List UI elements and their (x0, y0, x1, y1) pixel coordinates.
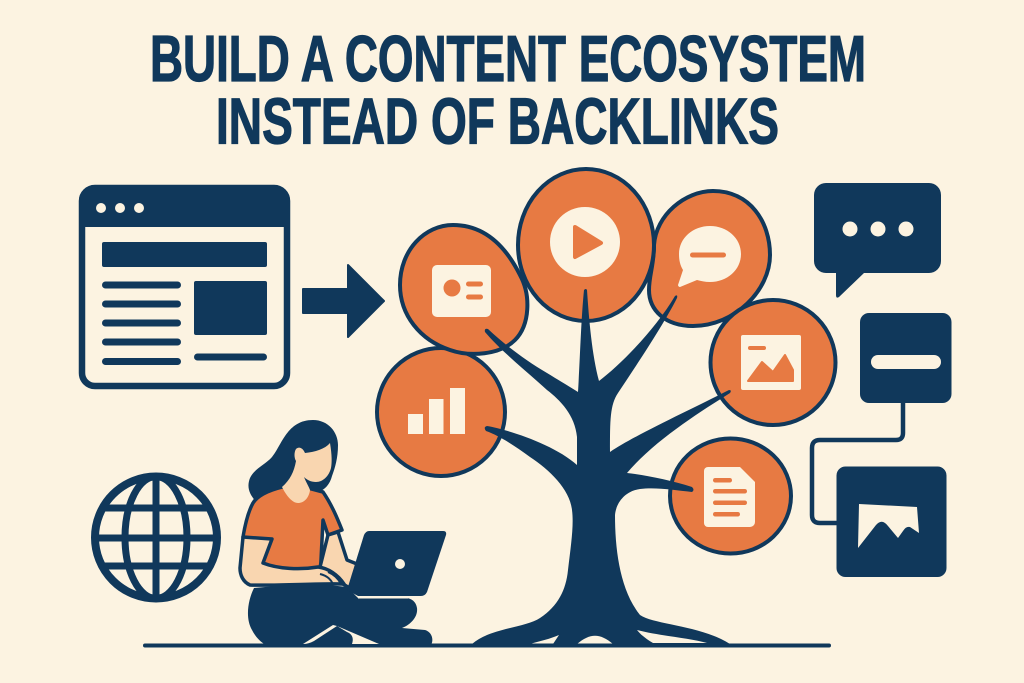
finger lines (320, 572, 341, 584)
left arm (240, 537, 344, 585)
person with laptop (240, 420, 446, 645)
hair (248, 420, 338, 505)
arrow (303, 265, 384, 337)
image card icon (836, 466, 946, 577)
right arm (320, 532, 362, 592)
connector lines (812, 402, 903, 523)
minus card icon (860, 313, 952, 403)
laptop logo (395, 559, 405, 569)
ground line (143, 644, 831, 648)
browser window icon (79, 185, 290, 386)
title (150, 22, 866, 158)
shirt (243, 487, 342, 580)
legs (248, 583, 432, 645)
shirt hem (253, 589, 275, 598)
slit between legs right (337, 626, 379, 644)
node: video play (518, 169, 654, 321)
face and neck (282, 443, 332, 503)
node: comment (649, 191, 770, 326)
title: INSTEAD OF BACKLINKS (216, 84, 779, 158)
speech bubble icon (814, 183, 941, 298)
node: image (710, 300, 836, 425)
laptop edge highlight (358, 597, 408, 598)
globe icon (95, 476, 217, 600)
laptop (347, 531, 446, 596)
node: document (670, 438, 791, 554)
node: profile card (400, 225, 527, 354)
node: bar chart (377, 348, 505, 476)
slit between legs (303, 625, 337, 644)
tree (472, 289, 731, 644)
